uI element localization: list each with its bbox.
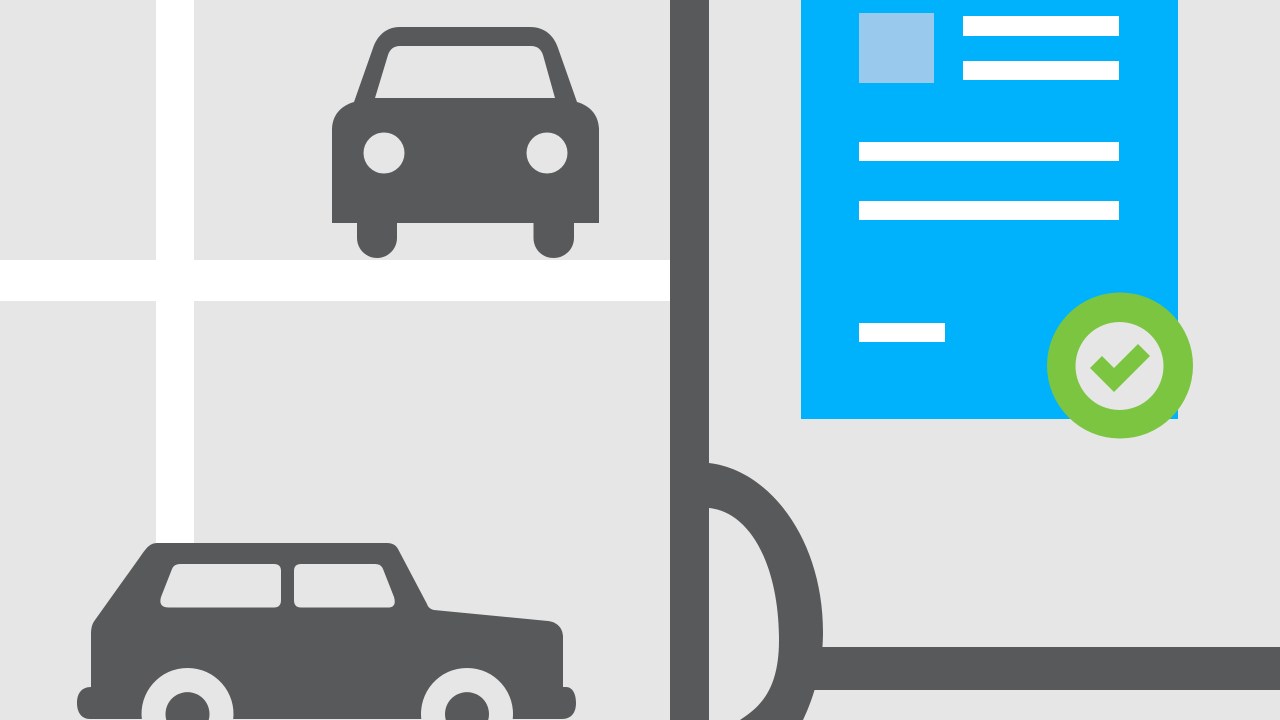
building outline (670, 0, 1280, 720)
panel: approved document (801, 0, 1178, 419)
white road grid (0, 0, 670, 560)
document photo (859, 13, 934, 83)
icon: side view car (77, 543, 576, 720)
icon: green check badge (1047, 292, 1193, 438)
car wheels (141, 668, 234, 720)
document text lines (859, 16, 1119, 342)
door arc (709, 463, 823, 720)
icon: front view car (332, 27, 599, 258)
car windows (160, 564, 395, 608)
